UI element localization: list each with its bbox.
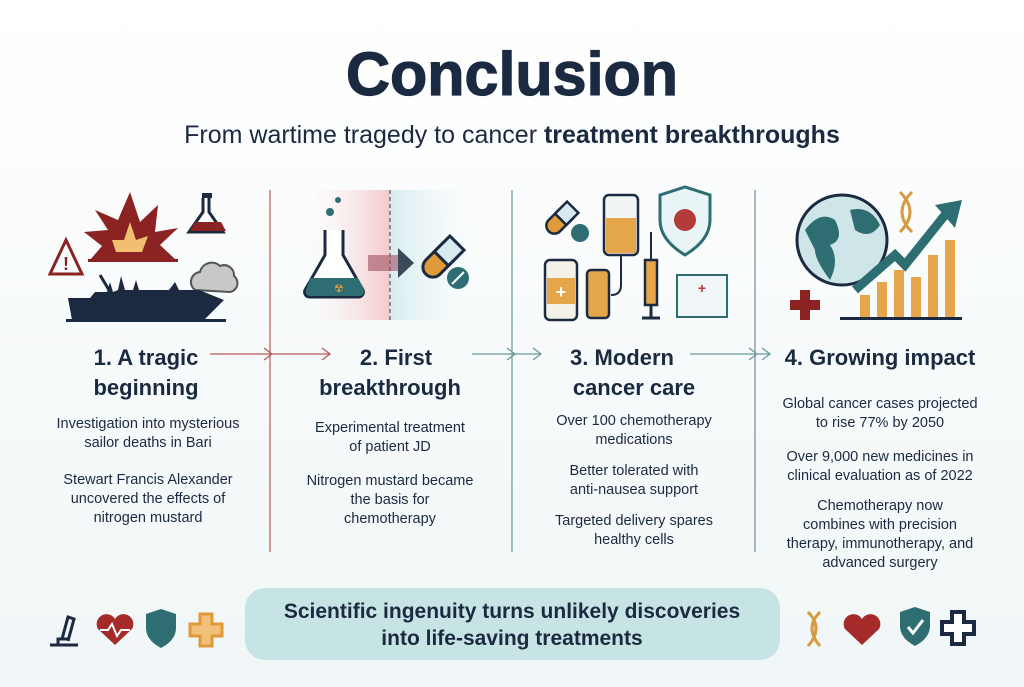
column 4 text: therapy, immunotherapy, and bbox=[787, 536, 973, 552]
column 3 text: anti-nausea support bbox=[570, 482, 698, 498]
icon: modern care: + bbox=[556, 282, 566, 302]
icon: warning bbox=[50, 240, 82, 274]
column 2 text: Nitrogen mustard became bbox=[307, 473, 473, 489]
icons: left row bbox=[50, 609, 222, 648]
column 3 text: Targeted delivery spares bbox=[555, 513, 713, 529]
column 4 text: combines with precision bbox=[803, 517, 957, 533]
callout banner bbox=[245, 588, 780, 660]
title: Conclusion bbox=[346, 40, 678, 108]
icons: right row bbox=[808, 607, 974, 646]
arrow: 2 to 3 bbox=[472, 348, 541, 360]
arrow: 3 to 4 bbox=[690, 348, 770, 360]
column 1 text: 1. A tragic bbox=[94, 345, 198, 370]
column 4 text: Over 9,000 new medicines in bbox=[786, 449, 974, 465]
icon: warning: ! bbox=[63, 254, 69, 274]
column 4 text: clinical evaluation as of 2022 bbox=[787, 468, 973, 484]
column 2 text: the basis for bbox=[350, 492, 430, 508]
subtitle: From wartime tragedy to cancer treatment breakthroughs bbox=[184, 121, 840, 149]
icon: flask to pill bbox=[305, 190, 470, 320]
icon: flask to pill: ☢ bbox=[334, 283, 344, 295]
column 2 text: 2. First bbox=[360, 345, 433, 370]
column 3 text: cancer care bbox=[573, 375, 695, 400]
column 1 text: uncovered the effects of bbox=[71, 491, 226, 507]
column 3 text: Better tolerated with bbox=[570, 463, 698, 479]
column 3 text: Over 100 chemotherapy bbox=[556, 413, 713, 429]
column 1 text: sailor deaths in Bari bbox=[84, 435, 212, 451]
icon: modern care: + bbox=[698, 280, 706, 296]
icon: globe and chart bbox=[790, 192, 962, 320]
column 4 text: Chemotherapy now bbox=[817, 498, 943, 514]
column 2 text bbox=[307, 345, 473, 527]
column 2 text: chemotherapy bbox=[344, 511, 437, 527]
icon: explosion and ship bbox=[50, 192, 238, 322]
column 1 text: beginning bbox=[93, 375, 199, 400]
icon: modern care bbox=[543, 187, 727, 320]
column 3 text: medications bbox=[595, 432, 673, 448]
column 1 text bbox=[57, 345, 239, 526]
column 3 text: 3. Modern bbox=[570, 345, 674, 370]
column 3 text bbox=[555, 345, 713, 548]
column 4 text bbox=[782, 345, 978, 571]
column 4 text: 4. Growing impact bbox=[785, 345, 976, 370]
column 4 text: to rise 77% by 2050 bbox=[816, 415, 944, 431]
icon: cloud bbox=[191, 263, 238, 292]
column 1 text: Investigation into mysterious bbox=[57, 416, 239, 432]
icon: flask red bbox=[189, 193, 226, 232]
callout banner: into life-saving treatments bbox=[381, 627, 643, 650]
column 4 text: Global cancer cases projected bbox=[782, 396, 978, 412]
column 1 text: nitrogen mustard bbox=[94, 510, 202, 526]
column 2 text: breakthrough bbox=[319, 375, 461, 400]
column 3 text: healthy cells bbox=[594, 532, 674, 548]
callout banner: Scientific ingenuity turns unlikely discoveries bbox=[284, 600, 740, 623]
column 2 text: Experimental treatment bbox=[315, 420, 465, 436]
column 4 text: advanced surgery bbox=[822, 555, 938, 571]
column 1 text: Stewart Francis Alexander bbox=[63, 472, 233, 488]
column 2 text: of patient JD bbox=[349, 439, 431, 455]
arrow: 1 to 2 bbox=[210, 348, 330, 360]
